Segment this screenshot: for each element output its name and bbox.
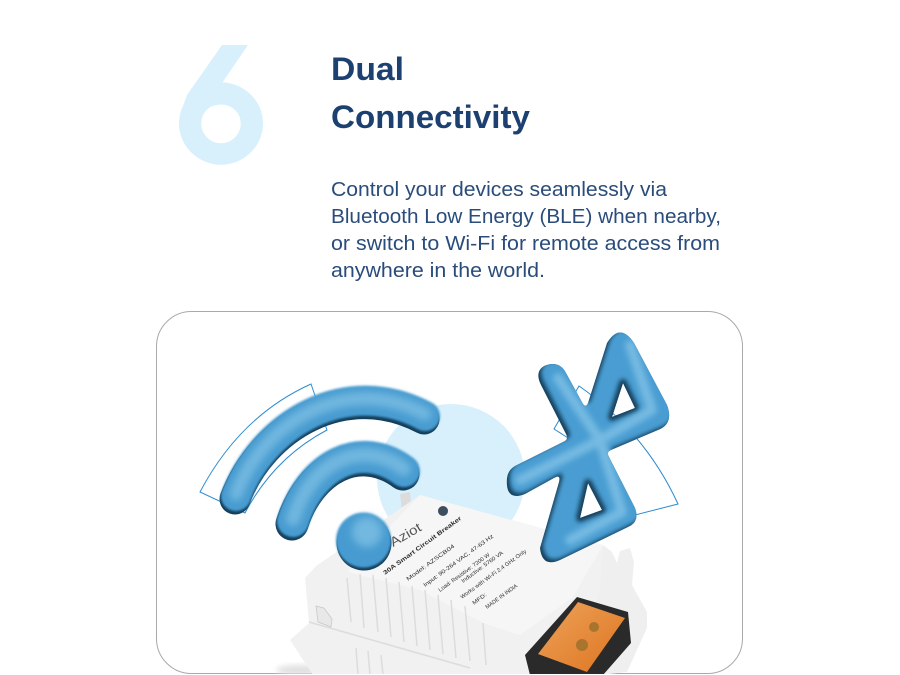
terminal screws (576, 622, 599, 651)
device label text (383, 515, 528, 611)
heading: Connectivity (331, 99, 530, 135)
description text: Bluetooth Low Energy (BLE) when nearby, (331, 205, 721, 228)
card border (156, 312, 742, 674)
icon: bluetooth symbol (506, 332, 670, 562)
side ribs (309, 574, 486, 675)
right mounting ear (596, 545, 647, 674)
panel: product card (156, 312, 742, 675)
description text: anywhere in the world. (331, 259, 545, 282)
device label text: Load: Resistive: 7200 W (438, 552, 492, 594)
device label text: 30A Smart Circuit Breaker (383, 515, 464, 577)
device label text: MADE IN INDIA (485, 583, 519, 611)
big number 6: 6 (166, 0, 272, 211)
description text (331, 178, 721, 282)
wifi dot (336, 512, 392, 570)
description text: or switch to Wi-Fi for remote access from (331, 232, 720, 255)
rear tabs (400, 492, 411, 508)
reset button (438, 506, 448, 516)
device label text: Input: 90-264 VAC, 47-63 Hz (423, 534, 495, 589)
heading (331, 51, 530, 135)
orange terminal cover (538, 602, 625, 672)
big number 6 (179, 45, 263, 165)
clip slot (316, 606, 332, 627)
device label text: MFD: (472, 592, 489, 607)
description text: Control your devices seamlessly via (331, 178, 668, 201)
device label text: Aziot (387, 519, 424, 550)
device label text: Inductive: 5760 VA (461, 550, 505, 585)
device: smart circuit breaker (276, 492, 647, 675)
device label text: Works with Wi-Fi 2.4 GHz Only (460, 549, 528, 601)
wifi middle arc (292, 455, 404, 524)
ground shadow (276, 664, 312, 674)
top face (420, 495, 511, 520)
outline arc behind bluetooth (554, 386, 678, 515)
outline arc behind wifi (200, 384, 327, 513)
heading: Dual (331, 51, 404, 87)
device label text: Model: AZSCB04 (406, 544, 456, 583)
wifi outer arc (235, 399, 425, 499)
terminal block base (525, 597, 631, 675)
icon: wifi symbol (235, 399, 425, 570)
pale blue circle (377, 404, 525, 552)
device body (290, 495, 573, 674)
